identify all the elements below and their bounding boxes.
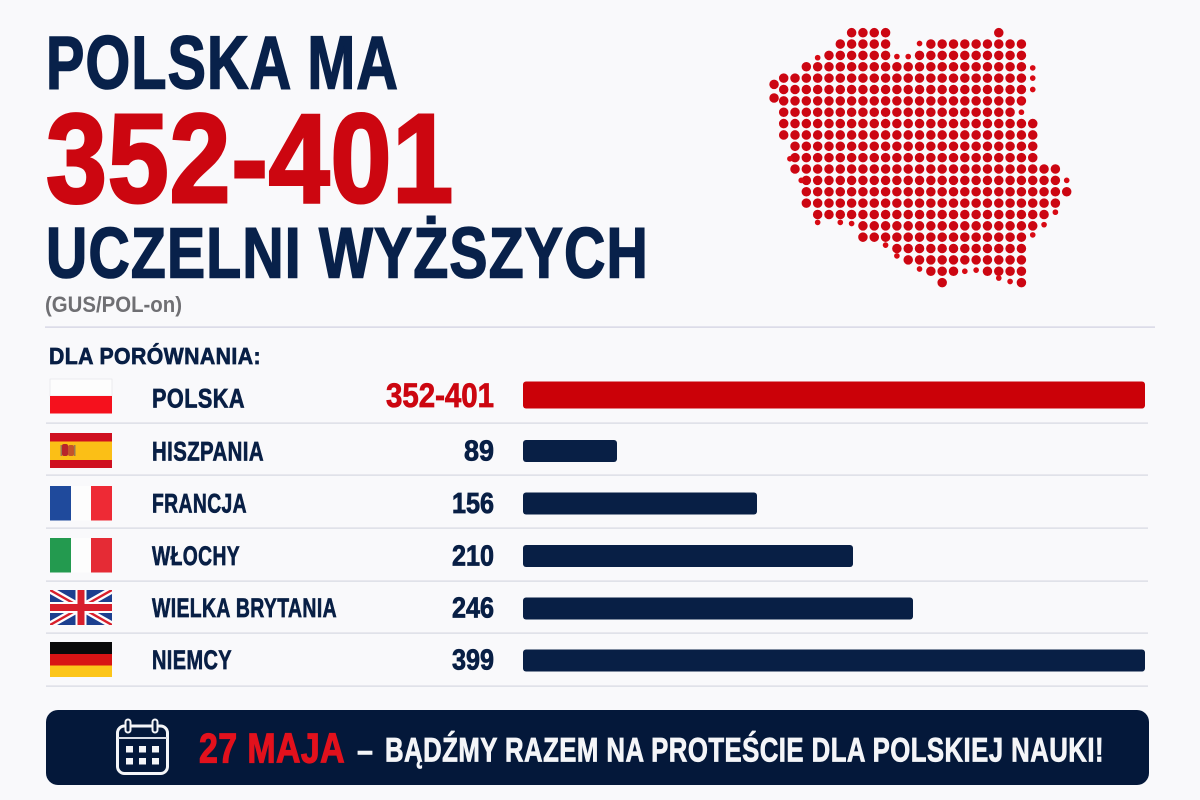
dotted map of Poland [774, 33, 1067, 283]
source note: (GUS/POL-on) [45, 292, 182, 317]
row: Włochy [50, 538, 853, 572]
icon: flag of Germany [50, 642, 112, 677]
value: Niemcy: 399 [452, 644, 494, 676]
value: Hiszpania: 89 [464, 436, 494, 468]
value: Włochy: 210 [452, 540, 494, 572]
call-to-action banner [46, 710, 1149, 785]
dash: – [357, 731, 373, 770]
label: Włochy: WŁOCHY [152, 541, 240, 571]
bar: Polska [523, 382, 1145, 408]
value: Francja: 156 [452, 488, 494, 520]
label: Polska: POLSKA [152, 384, 245, 414]
icon: flag of Italy [50, 538, 112, 572]
row: Niemcy [50, 642, 1145, 677]
value: Polska: 352-401 [386, 377, 494, 415]
icon: calendar [118, 720, 168, 774]
bar: Niemcy [523, 650, 1145, 672]
icon: flag of Spain [50, 433, 112, 468]
icon: flag of Poland [50, 379, 112, 414]
row: Wielka Brytania [50, 590, 913, 625]
bar: Włochy [523, 545, 853, 567]
label: Niemcy: NIEMCY [152, 645, 232, 675]
row: Polska [50, 377, 1145, 415]
value: Wielka Brytania: 246 [452, 592, 494, 624]
icon: flag of France [50, 486, 112, 520]
label: Hiszpania: HISZPANIA [152, 436, 264, 466]
bar: Hiszpania [523, 440, 617, 462]
bar: Wielka Brytania [523, 598, 913, 620]
icon: flag of United Kingdom [50, 590, 112, 625]
row: Francja [50, 486, 757, 520]
top divider [45, 326, 1155, 328]
comparison heading: DLA PORÓWNANIA: [49, 342, 261, 369]
title line: Polska ma: POLSKA MA [46, 20, 399, 104]
headline number: 352-401 [46, 88, 454, 229]
row: Hiszpania [50, 433, 617, 468]
bar: Francja [523, 492, 757, 514]
title line: uczelni wyższych: UCZELNI WYŻSZYCH [46, 214, 649, 294]
date: 27 MAJA [199, 724, 345, 772]
label: Francja: FRANCJA [152, 488, 247, 518]
label: Wielka Brytania: WIELKA BRYTANIA [152, 593, 337, 623]
title block [45, 20, 649, 317]
